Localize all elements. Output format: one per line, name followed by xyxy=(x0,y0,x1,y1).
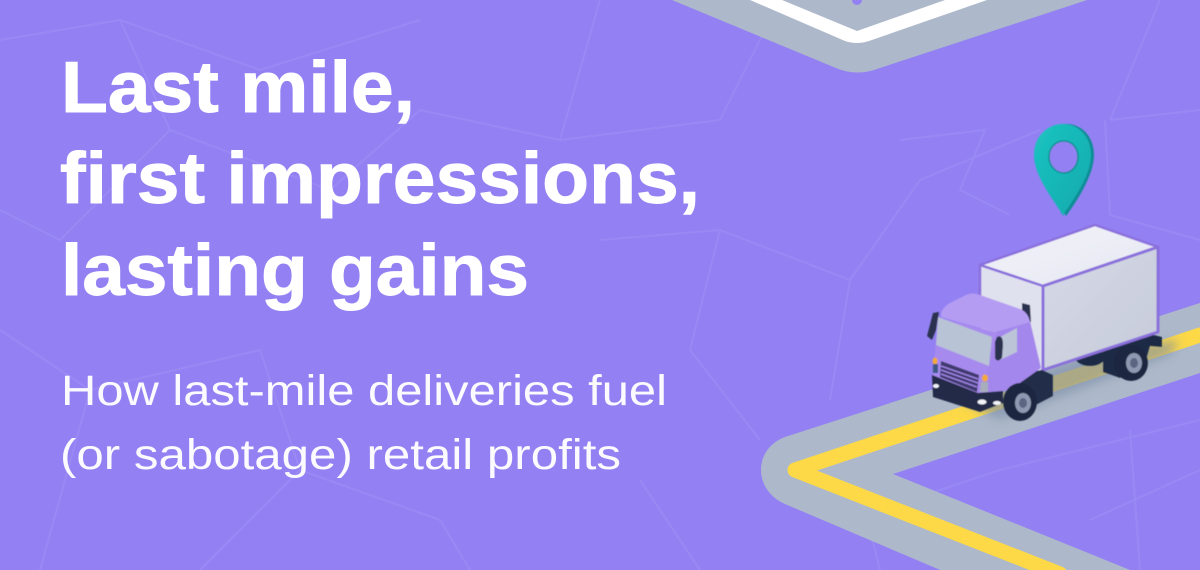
truck shadow xyxy=(960,340,1180,420)
title xyxy=(60,48,700,311)
cargo box left side xyxy=(980,265,1043,378)
title: Last mile, xyxy=(61,48,415,128)
left mirror xyxy=(927,312,939,340)
road surface xyxy=(761,303,1200,570)
cab front xyxy=(933,317,995,394)
cab side xyxy=(978,321,1041,394)
icon: location pin xyxy=(1034,124,1094,216)
headlights xyxy=(933,384,1001,405)
subtitle xyxy=(60,367,667,479)
bumper xyxy=(932,375,1003,412)
cargo box right side xyxy=(1043,247,1158,370)
white road line xyxy=(750,0,987,43)
turn signals xyxy=(932,358,988,392)
pin face xyxy=(1034,124,1091,216)
cargo box top xyxy=(980,225,1158,286)
purple marker tip xyxy=(852,0,862,5)
top road xyxy=(672,0,1087,72)
rear chassis xyxy=(1103,334,1162,378)
side window xyxy=(1000,328,1017,360)
yellow centre line xyxy=(795,335,1200,570)
grille xyxy=(940,361,979,392)
subtitle: How last-mile deliveries fuel xyxy=(61,367,667,415)
cab roof xyxy=(941,294,1030,332)
far rear wheel xyxy=(1075,348,1105,366)
road surface xyxy=(672,0,1087,72)
exhaust stack xyxy=(1022,303,1031,322)
front wheel xyxy=(1003,383,1037,421)
front chassis xyxy=(1005,370,1053,410)
pin depth xyxy=(1036,124,1094,216)
bottom road xyxy=(761,303,1200,570)
rear wheel xyxy=(1114,345,1148,381)
truck xyxy=(927,225,1180,421)
pin hole xyxy=(1049,141,1078,173)
title: first impressions, xyxy=(60,139,700,219)
subtitle: (or sabotage) retail profits xyxy=(60,431,621,479)
windshield xyxy=(936,317,992,366)
side mirror xyxy=(995,336,1003,360)
title: lasting gains xyxy=(61,231,529,311)
